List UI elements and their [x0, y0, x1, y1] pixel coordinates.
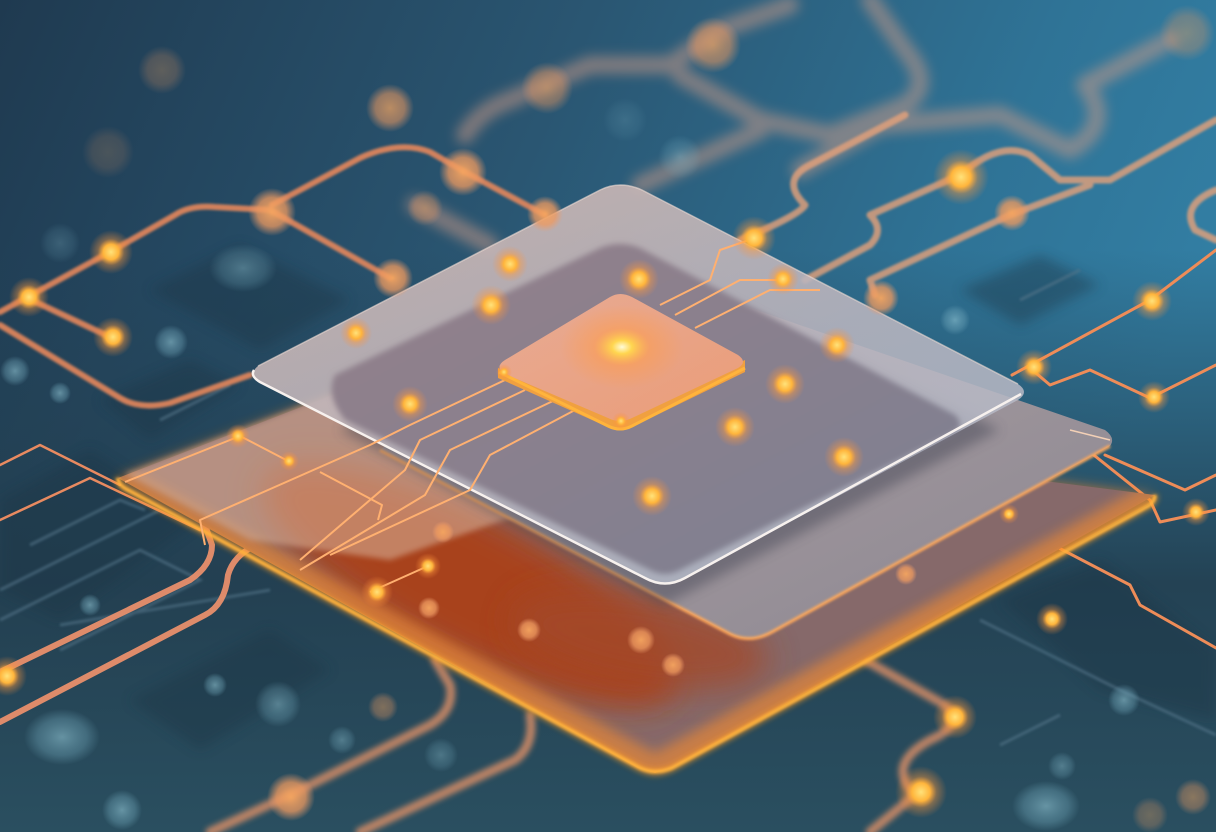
lower glass plate — [118, 392, 1155, 773]
top glass plate — [253, 185, 1024, 584]
upper left traces — [0, 147, 545, 406]
central chip — [498, 294, 745, 430]
lower left thick traces — [0, 525, 300, 722]
shadow below top plate — [340, 240, 1000, 605]
far blurred traces — [415, 0, 1170, 245]
circuit lines on glass — [125, 238, 820, 592]
mid blurred traces, upper right — [740, 115, 1216, 295]
right traces — [1005, 250, 1216, 648]
middle glass plate — [125, 270, 1112, 639]
grey-blue board tracks — [0, 270, 1216, 745]
inner dark panel — [332, 244, 960, 574]
orange glow inside lower plate — [118, 418, 1155, 770]
dark circuit board blocks — [0, 245, 1216, 750]
bottom traces — [210, 660, 952, 832]
left traces — [0, 445, 200, 530]
